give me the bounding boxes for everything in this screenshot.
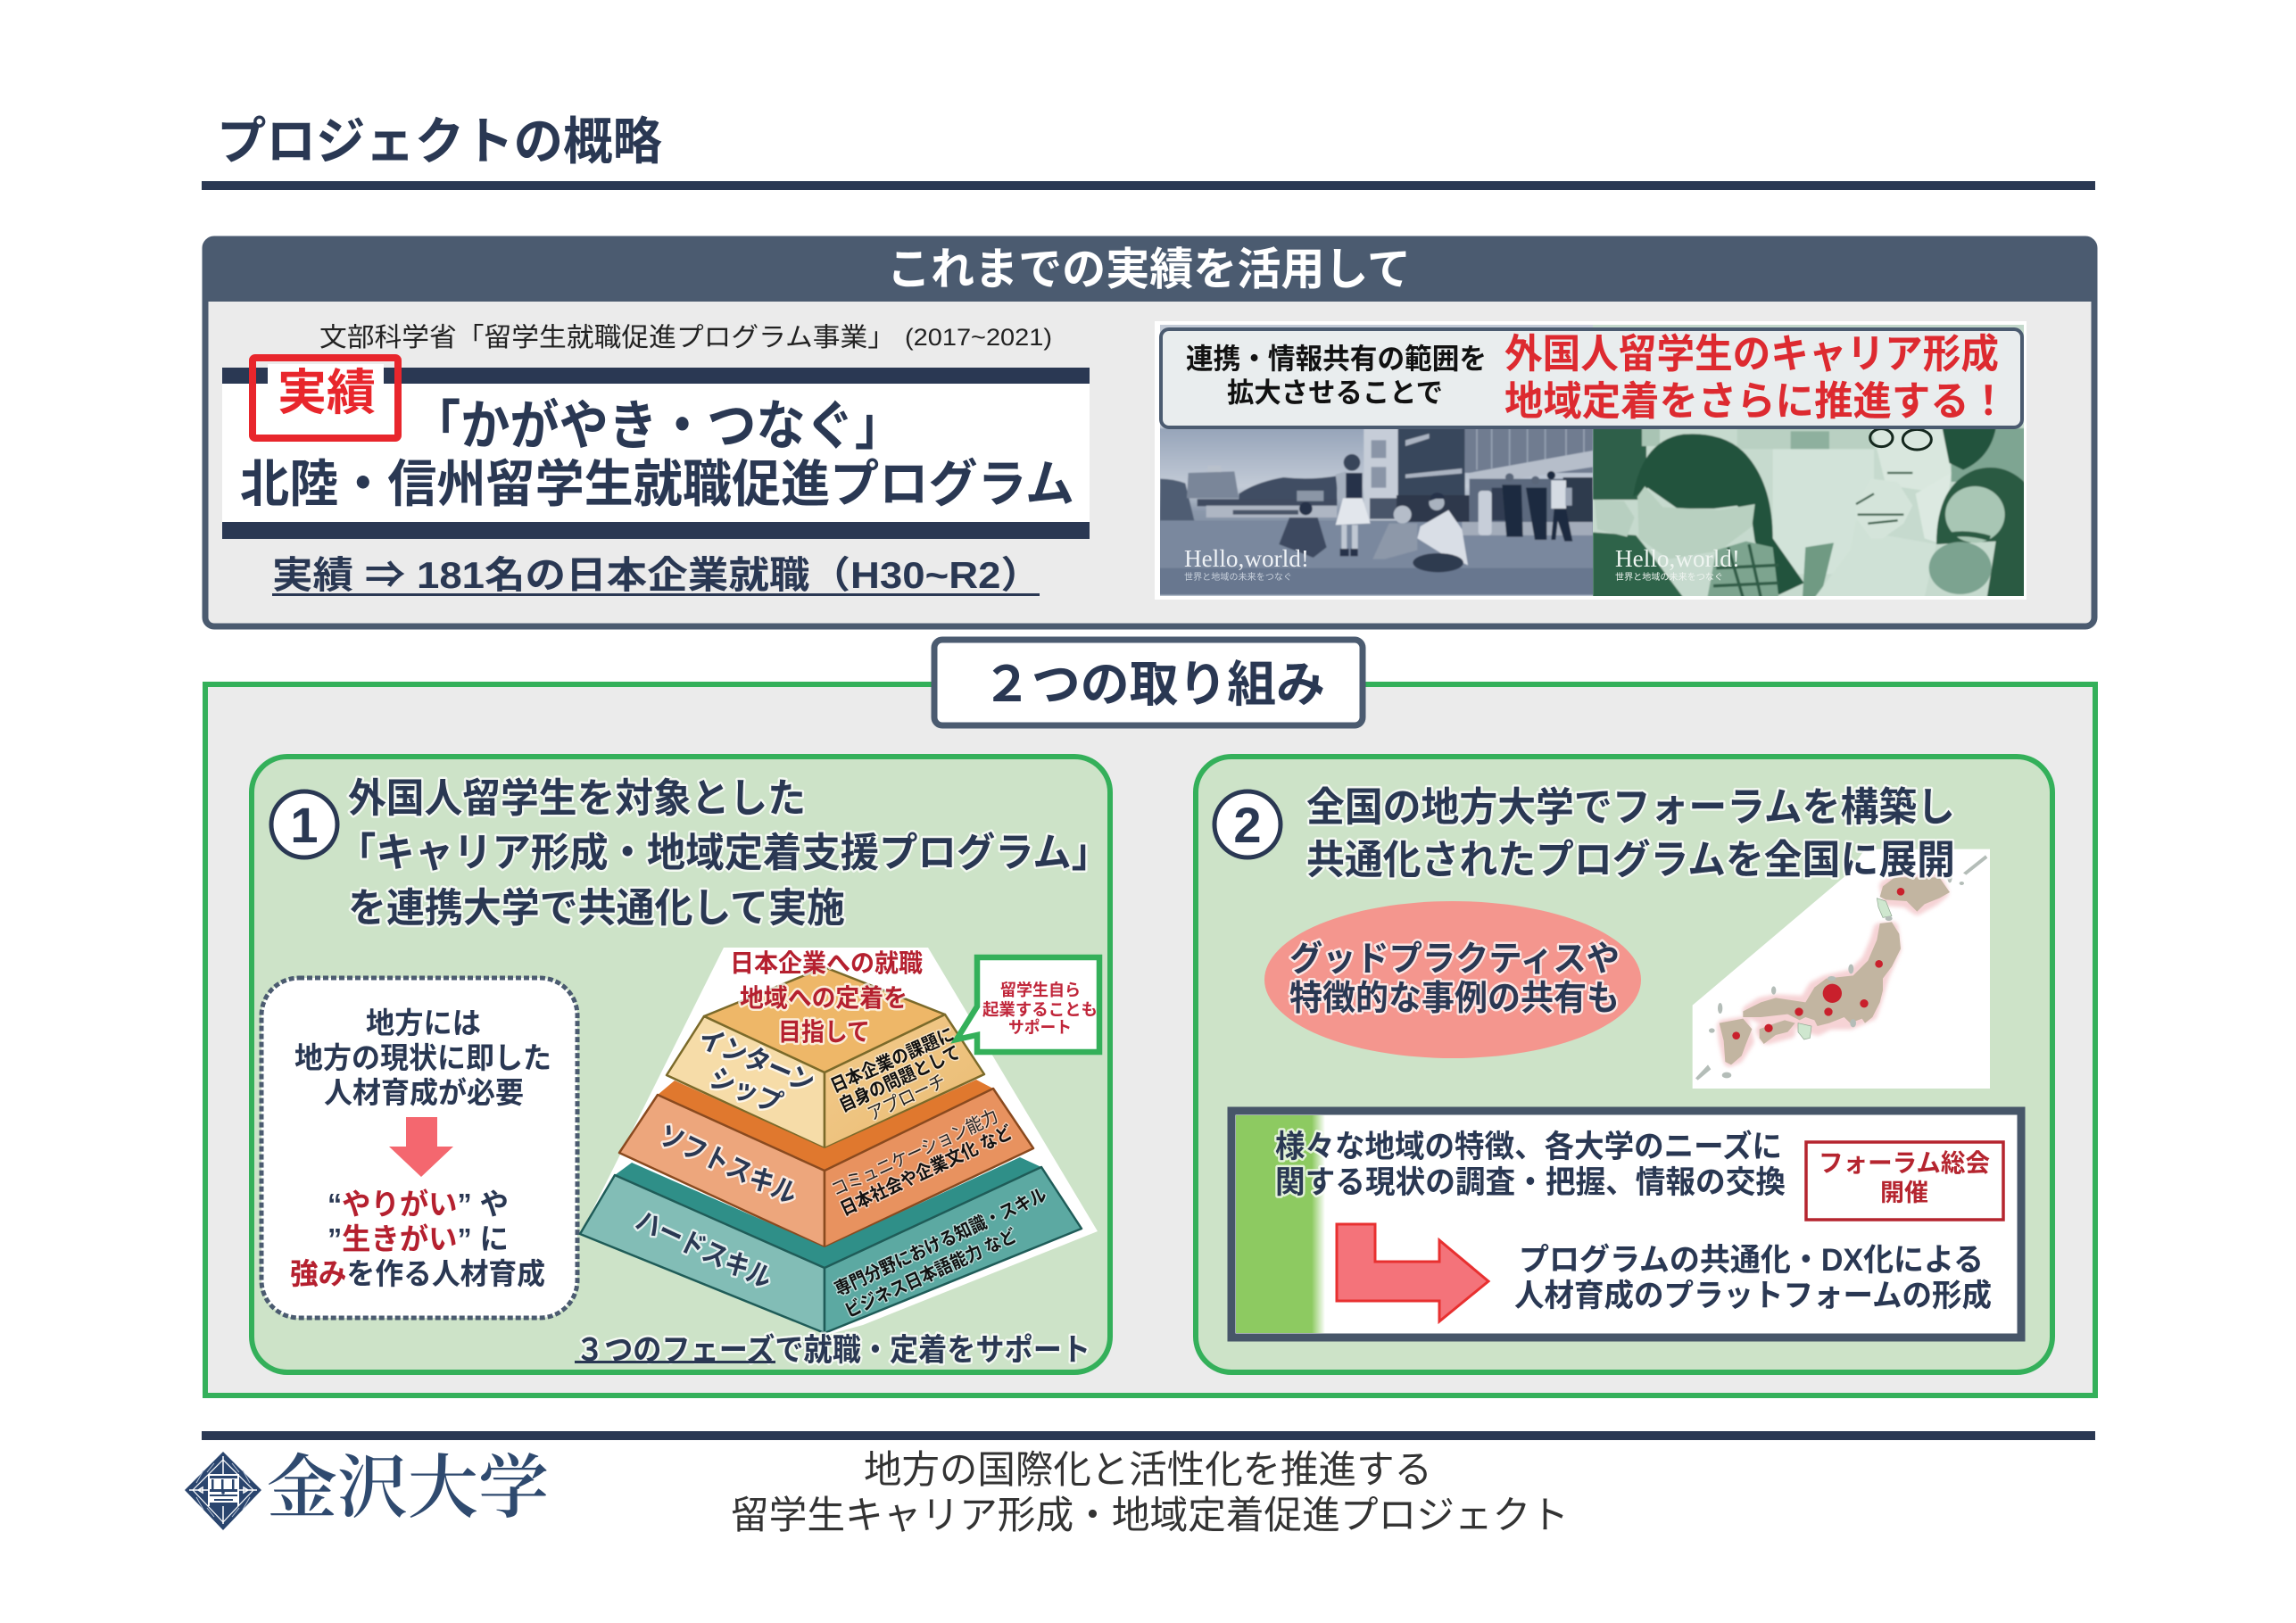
line: 生きがい: ”生きがい” に (327, 1222, 509, 1255)
dashed callout: 人材育成: 地方には (366, 1006, 481, 1039)
callout: 起業サポート (957, 957, 1099, 1052)
caption: 3つのフェーズ: ３つのフェーズで就職・定着をサポート (576, 1332, 1090, 1368)
tier: hard skills (580, 1157, 1082, 1333)
title: プロジェクトの概略 (217, 113, 662, 170)
forum process box (1231, 1111, 2021, 1337)
footer project name (731, 1449, 1569, 1537)
tier labels left: インターン (694, 1023, 819, 1098)
seated group (1394, 506, 1412, 524)
pyramid goal text: 地域への定着を (740, 984, 908, 1012)
outcome text (1514, 1243, 1992, 1313)
right background (1952, 428, 2027, 482)
panel heading: これまでの実績を活用して (887, 244, 1411, 294)
panel 2 heading: 共通化されたプログラムを全国に展開 (1306, 837, 1955, 882)
tier: internship (667, 967, 984, 1148)
program source line: (2017~2021) (905, 324, 1052, 351)
program title banner: 北陸・信州留学生就職促進プログラム (240, 456, 1074, 513)
number badge 2 (1214, 791, 1281, 857)
callout: 起業サポート: サポート (1008, 1018, 1072, 1037)
right person (1936, 468, 2027, 598)
panel 2 heading: 全国の地方大学でフォーラムを構築し (1306, 784, 1955, 830)
panel 1: program (252, 757, 1110, 1372)
map of Japan (1693, 849, 1990, 1089)
caption right (1615, 550, 1737, 581)
number badge 1 (271, 791, 337, 857)
overlay message box: 拡大させることで (1227, 377, 1443, 409)
tier descriptions right: 日本社会や企業文化 など (837, 1122, 1016, 1220)
footer project name: 留学生キャリア形成・地域定着促進プロジェクト (731, 1495, 1569, 1537)
stamp: 実績: 実績 (278, 365, 376, 420)
number badge 2: 2 (1233, 797, 1262, 853)
survey text: 様々な地域の特徴、各大学のニーズに (1275, 1129, 1782, 1164)
overlay message box (1161, 329, 2022, 427)
caption left (1185, 550, 1306, 581)
overlay message box: 地域定着をさらに推進する！ (1504, 378, 2008, 424)
tier labels left: シップ (705, 1062, 786, 1120)
oval: good practice: 特徴的な事例の共有も (1289, 980, 1620, 1018)
pyramid goal text (730, 949, 923, 1046)
program source line: 文部科学省「留学生就職促進プログラム事業」 (319, 323, 895, 352)
panel 2: forum (1196, 757, 2052, 1372)
number badge 1: 1 (290, 797, 319, 853)
scarf (1707, 542, 1778, 598)
overlay message box: 連携・情報共有の範囲を (1186, 343, 1487, 375)
tier descriptions right: アプローチ (865, 1071, 949, 1125)
caption right: 世界と地域の未来をつなぐ (1615, 571, 1723, 583)
panel: 2つの取り組み (205, 640, 2095, 1395)
forum general meeting box: 開催 (1880, 1180, 1928, 1206)
caption left: 世界と地域の未来をつなぐ (1184, 571, 1292, 583)
woman face (1637, 486, 1755, 559)
outcome text: 人材育成のプラットフォームの形成 (1514, 1279, 1992, 1313)
icon: university crest (185, 1452, 261, 1530)
dark sliver (1803, 542, 1834, 598)
university logo (185, 1449, 549, 1530)
caption left: Hello,world! (1184, 545, 1309, 572)
line: やりがい: “やりがい” や (327, 1188, 509, 1221)
dashed callout: 人材育成: 人材育成が必要 (324, 1076, 524, 1109)
stamp: 実績 (253, 358, 398, 438)
forum general meeting box (1806, 1142, 2003, 1220)
seated man (1299, 502, 1313, 515)
caption right: Hello,world! (1615, 545, 1740, 572)
program title banner: 「かがやき・つなぐ」 (411, 396, 904, 456)
panel 1 heading: 「キャリア形成・地域定着支援プログラム」 (337, 830, 1110, 875)
outcome text: プログラムの共通化・DX化による (1519, 1243, 1984, 1278)
program title banner (222, 368, 1090, 539)
result line: 実績 ⇒ 181名の日本企業就職（H30~R2） (272, 554, 1041, 596)
oval: good practice (1264, 901, 1641, 1058)
section tab: ２つの取り組み (982, 657, 1325, 712)
overlay message box: 外国人留学生のキャリア形成 (1504, 331, 1999, 377)
tier: soft skills (619, 1080, 1033, 1247)
man (1942, 429, 1996, 470)
university name: 金沢大学 (267, 1449, 549, 1527)
tier descriptions right: 日本企業の課題に (827, 1024, 957, 1097)
panel 2 heading (1306, 784, 1955, 882)
callout: 起業サポート: 留学生自ら (1000, 981, 1081, 999)
survey text: 関する現状の調査・把握、情報の交換 (1275, 1165, 1786, 1200)
dashed callout: 人材育成 (261, 978, 577, 1318)
survey text (1275, 1129, 1786, 1200)
standing figures (1479, 491, 1492, 535)
tier descriptions right: 専門分野における知識・スキル (831, 1184, 1050, 1300)
tier descriptions right: コミュニケーション能力 (828, 1105, 1001, 1200)
panel 1 heading: を連携大学で共通化して実施 (348, 885, 845, 931)
panel 1 heading: 外国人留学生を対象とした (348, 775, 806, 821)
woman hair (1633, 434, 1804, 595)
tier labels left: ソフトスキル (654, 1119, 802, 1211)
glasses (1870, 429, 1931, 450)
panel: これまでの実績を活用して (203, 237, 2097, 626)
pyramid chart (580, 948, 1098, 1335)
photo: students (green duotone) (1593, 325, 2027, 598)
icon: down arrow (389, 1117, 453, 1177)
pyramid goal text: 目指して (778, 1018, 870, 1046)
panel 1 heading (337, 775, 1110, 931)
tier labels left: ハードスキル (631, 1205, 777, 1295)
tier descriptions right (827, 1024, 1050, 1321)
pyramid goal text: 日本企業への就職 (730, 949, 923, 977)
footer project name: 地方の国際化と活性化を推進する (864, 1449, 1432, 1492)
line: 強みを作る: 強みを作る人材育成 (290, 1257, 545, 1290)
tier descriptions right: 自身の問題として (836, 1042, 964, 1116)
oval: good practice: グッドプラクティスや (1289, 940, 1620, 979)
panel header bar (203, 237, 2097, 302)
dashed callout: 人材育成: 地方の現状に即した (294, 1041, 551, 1074)
section tab (934, 640, 1363, 725)
tier descriptions right: ビジネス日本語能力 など (841, 1225, 1020, 1321)
icon: bent arrow (1337, 1224, 1488, 1321)
forum general meeting box: フォーラム総会 (1819, 1149, 1990, 1177)
woman standing (1344, 454, 1360, 471)
callout: 起業サポート: 起業することも (982, 1000, 1098, 1019)
photo banner (1155, 321, 2027, 600)
photo: campus group (blue duotone) (1156, 325, 1596, 596)
tier labels left (631, 1023, 819, 1295)
